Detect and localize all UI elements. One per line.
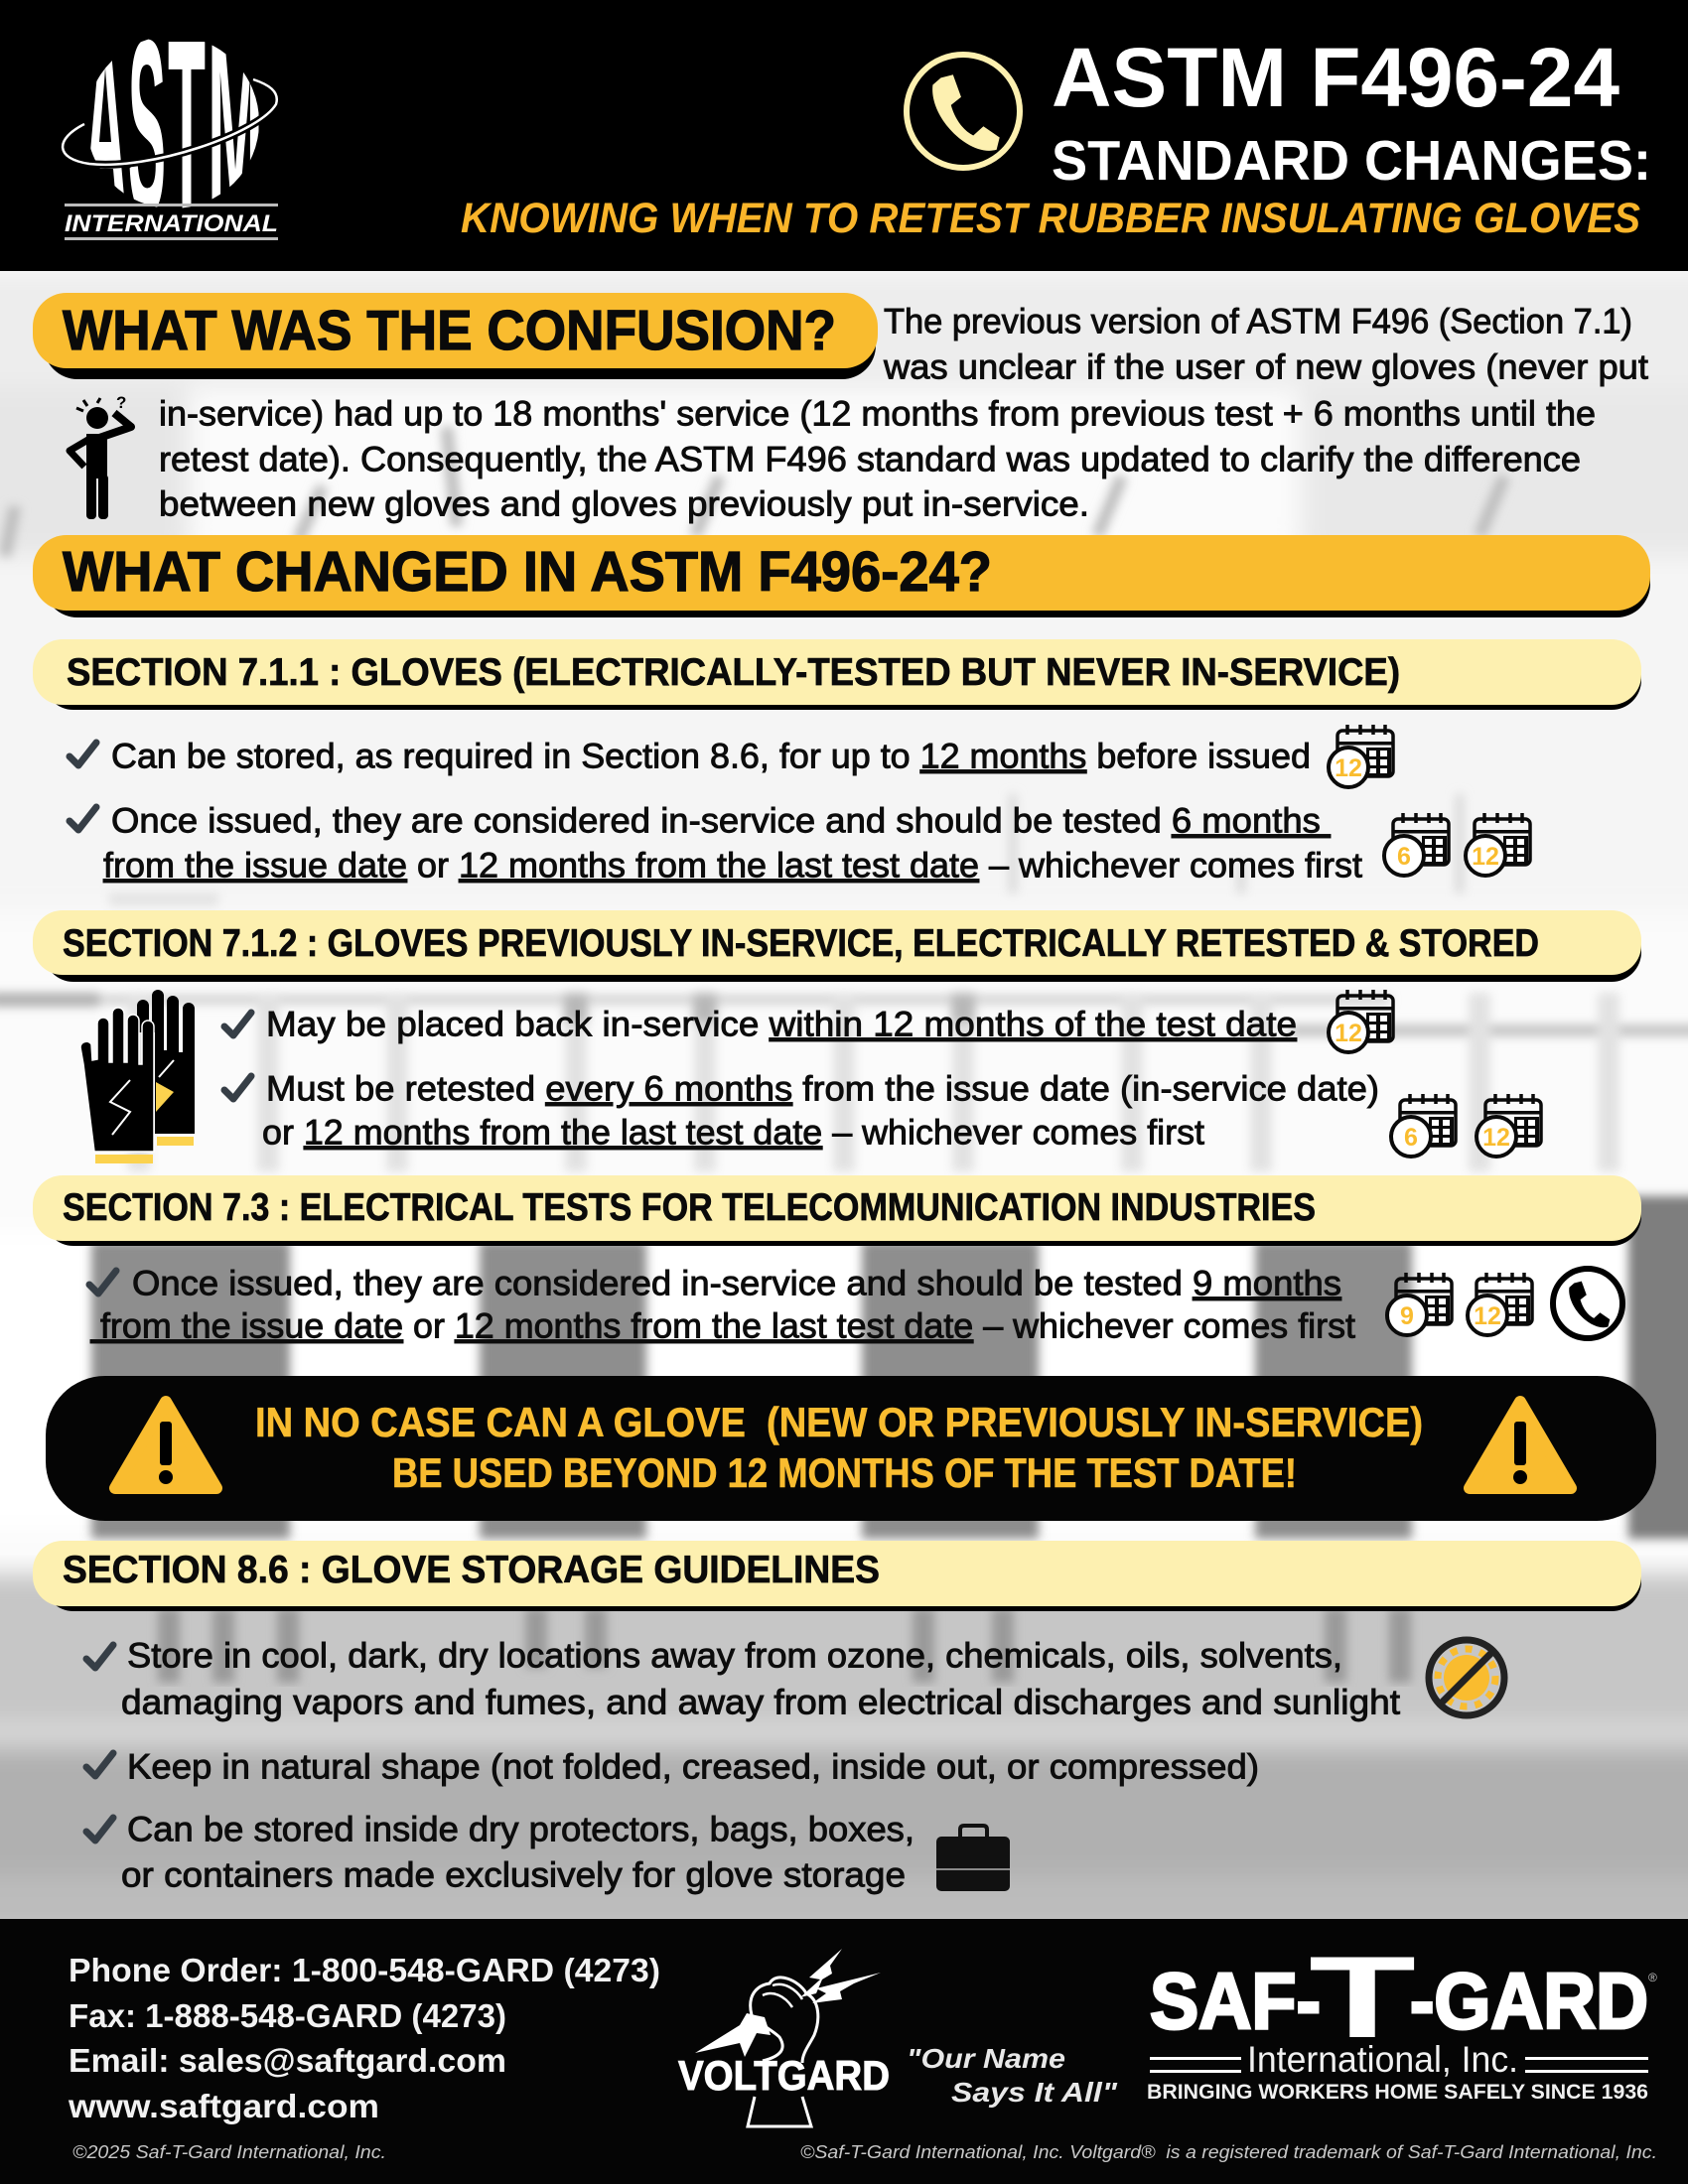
heading pill: what changed: WHAT CHANGED IN ASTM F496-24?: [63, 540, 992, 604]
icon: calendar 12: [1468, 1273, 1532, 1335]
bullet: natural shape: Keep in natural shape (not folded, creased, inside out, or compressed): [127, 1747, 1259, 1787]
bullet: retested every 6 months: or 12 months from the last test date – whichever comes first: [262, 1114, 1204, 1152]
contact details: Email: sales@saftgard.com: [69, 2042, 506, 2079]
warning callout: [46, 1376, 1656, 1521]
icon: calendar 6: [1384, 813, 1449, 876]
bullet: dry protectors: Can be stored inside dry protectors, bags, boxes,: [127, 1811, 914, 1848]
icon: calendar 6: 6: [1404, 1124, 1418, 1152]
confusion paragraph: [159, 302, 1648, 524]
icon: calendar 12: [1466, 813, 1530, 876]
photo background: blurred grayscale gloves on rack: [0, 271, 1688, 1936]
section header 8.6: [33, 1541, 1641, 1611]
icon: calendar 6: [1391, 1094, 1456, 1157]
icon: briefcase: [936, 1826, 1010, 1891]
trademark notice: ©Saf-T-Gard International, Inc. Voltgard® is a registered trademark of Saf-T-Gard International, Inc.: [800, 2142, 1657, 2162]
bullet: test 9 months: [89, 1265, 1355, 1346]
bullet: retested every 6 months: Must be retested every 6 months from the issue date (in-service date): [266, 1070, 1379, 1108]
bullet: dry protectors: or containers made exclusively for glove storage: [121, 1856, 906, 1894]
confusion paragraph: The previous version of ASTM F496 (Section 7.1): [884, 302, 1632, 341]
icon: calendar 12: 12: [1472, 843, 1499, 871]
confusion paragraph: in-service) had up to 18 months' service (12 months from previous test + 6 months until the: [159, 395, 1596, 433]
Saf-T-Gard logo: SAF-: [1150, 1957, 1321, 2045]
bullet: once issued test 6 months: Once issued, they are considered in-service and should be tested 6 months: [111, 802, 1331, 840]
Voltgard logo: VOLTGARD: [678, 2052, 890, 2099]
bullet: back in service within 12 months: May be placed back in-service within 12 months of the test date: [266, 1005, 1297, 1044]
Voltgard logo: [678, 1949, 890, 2126]
bullet: retested every 6 months: [224, 1070, 1379, 1152]
bullet: dry protectors: [86, 1811, 914, 1894]
panel: section 7.3: [33, 1175, 1641, 1346]
section header 7.3: [33, 1175, 1641, 1246]
icon: calendar 9: [1387, 1273, 1452, 1335]
Saf-T-Gard logo: ®: [1648, 1971, 1657, 1984]
Saf-T-Gard logo: BRINGING WORKERS HOME SAFELY SINCE 1936: [1147, 2081, 1648, 2104]
tagline: KNOWING WHEN TO RETEST RUBBER INSULATING GLOVES: [461, 195, 1640, 242]
bullet: test 9 months: Once issued, they are considered in-service and should be tested 9 months: [132, 1265, 1341, 1302]
confusion paragraph: between new gloves and gloves previously put in-service.: [159, 484, 1089, 524]
Saf-T-Gard logo: -GARD: [1410, 1957, 1648, 2045]
panel: section 8.6: [33, 1541, 1641, 1894]
warning text: IN NO CASE CAN A GLOVE (NEW OR PREVIOUSLY IN-SERVICE): [255, 1399, 1423, 1445]
bullet: test 9 months: from the issue date or 12 months from the last test date – whichever comes first: [90, 1306, 1355, 1346]
icon: confused person: [70, 393, 131, 519]
icon: calendar 12: [1329, 725, 1393, 787]
icon: calendar 12: 12: [1474, 1302, 1501, 1330]
bullet: store in cool dark dry: [86, 1636, 1400, 1721]
confusion paragraph: retest date). Consequently, the ASTM F496 standard was updated to clarify the difference: [159, 441, 1581, 478]
subtitle: STANDARD CHANGES:: [1052, 129, 1651, 193]
Saf-T-Gard logo: T: [1309, 1932, 1416, 2062]
icon: calendar 9: 9: [1400, 1302, 1414, 1330]
icon: telephone in circle: [907, 55, 1020, 168]
slogan: [907, 2043, 1118, 2108]
icon: warning triangle left: [115, 1402, 216, 1488]
bullet: store in cool dark dry: Store in cool, dark, dry locations away from ozone, chemicals, oils, solvents,: [127, 1636, 1342, 1676]
slogan: "Our Name: [907, 2043, 1065, 2074]
icon: calendar 12: 12: [1482, 1124, 1510, 1152]
icon: telephone: [1553, 1269, 1622, 1338]
confusion paragraph: was unclear if the user of new gloves (never put: [883, 347, 1648, 387]
heading pill: what changed: [33, 535, 1650, 617]
bullet: once issued test 6 months: [70, 802, 1362, 886]
bullet: once issued test 6 months: from the issue date or 12 months from the last test date – whichever comes first: [103, 846, 1362, 886]
section header 7.1.2: [33, 910, 1641, 982]
icon: calendar 12: 12: [1335, 754, 1362, 782]
icon: calendar 12: 12: [1335, 1020, 1362, 1047]
contact details: Phone Order: 1-800-548-GARD (4273): [69, 1952, 660, 1988]
contact details: [68, 1952, 660, 2124]
heading pill: confusion: WHAT WAS THE CONFUSION?: [63, 299, 836, 362]
slogan: Says It All": [951, 2077, 1118, 2108]
warning text: BE USED BEYOND 12 MONTHS OF THE TEST DATE!: [392, 1449, 1297, 1496]
footer band: [0, 1919, 1688, 2184]
panel: section 7.1.1: [33, 639, 1641, 886]
warning text: [255, 1399, 1423, 1496]
panel: what was the confusion: [33, 293, 1648, 524]
icon: no sunlight: [1429, 1640, 1504, 1715]
icon: rubber gloves: [80, 990, 195, 1163]
bullet: store in cool dark dry: damaging vapors and fumes, and away from electrical discharges and sunlight: [121, 1684, 1400, 1721]
section header 7.3: SECTION 7.3 : ELECTRICAL TESTS FOR TELECOMMUNICATION INDUSTRIES: [63, 1186, 1316, 1229]
icon: calendar 6: 6: [1397, 843, 1411, 871]
copyright left: ©2025 Saf-T-Gard International, Inc.: [72, 2142, 386, 2162]
section header 7.1.1: SECTION 7.1.1 : GLOVES (ELECTRICALLY-TESTED BUT NEVER IN-SERVICE): [67, 651, 1400, 694]
Saf-T-Gard logo: [1147, 1932, 1657, 2104]
icon: warning triangle right: [1470, 1402, 1571, 1488]
section header 8.6: SECTION 8.6 : GLOVE STORAGE GUIDELINES: [63, 1549, 880, 1591]
bullet: stored up to 12 months: Can be stored, as required in Section 8.6, for up to 12 months before issued: [111, 737, 1311, 776]
ASTM International logo: [62, 40, 278, 240]
icon: confused person: ?: [116, 393, 126, 412]
header band: [0, 0, 1688, 271]
icon: calendar 12: [1329, 990, 1393, 1052]
title: ASTM F496-24: [1052, 31, 1619, 124]
panel: section 7.1.2: [33, 910, 1641, 1163]
Saf-T-Gard logo: International, Inc.: [1247, 2039, 1518, 2080]
ASTM International logo: INTERNATIONAL: [65, 210, 278, 237]
icon: calendar 12: [1477, 1094, 1541, 1157]
contact details: www.saftgard.com: [68, 2088, 379, 2124]
section header 7.1.1: [33, 639, 1641, 710]
contact details: Fax: 1-888-548-GARD (4273): [69, 1997, 506, 2034]
